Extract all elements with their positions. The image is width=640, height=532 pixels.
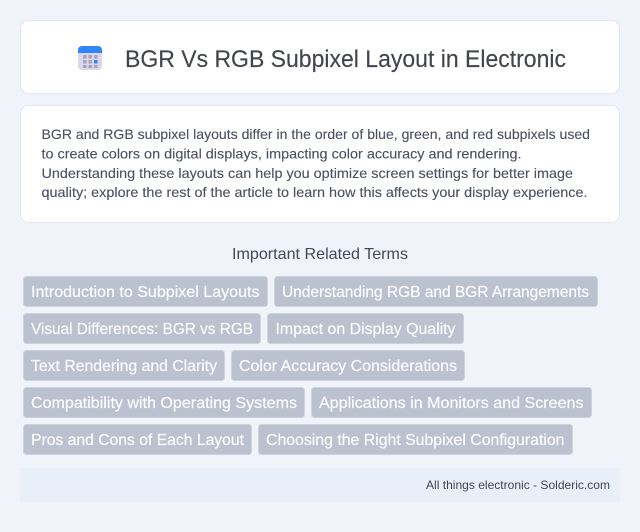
text block: intro: Understanding these layouts can help you optimize screen settings for better image: [42, 165, 573, 181]
chip: applications: [312, 388, 592, 418]
panel: intro paragraph: [20, 106, 620, 222]
chip: understanding: Understanding RGB and BGR Arrangements: [282, 284, 589, 301]
chip: compatibility: [24, 388, 304, 418]
chip: introduction: Introduction to Subpixel Layouts: [31, 284, 260, 301]
chip: compatibility: Compatibility with Operating Systems: [31, 395, 297, 412]
chip: color accuracy: Color Accuracy Considerations: [239, 358, 457, 375]
text block: intro: quality; explore the rest of the article to learn how this affects your display experience.: [42, 184, 588, 200]
chip: understanding: [274, 276, 598, 306]
chip: text rendering: Text Rendering and Clarity: [31, 358, 217, 375]
chip: introduction: [24, 276, 268, 306]
icon: calendar grid: [78, 46, 102, 70]
text block: intro: to create colors on digital displays, impacting color accuracy and rendering.: [42, 146, 522, 162]
footer: [20, 468, 620, 502]
footer: All things electronic - Solderic.com: [426, 478, 610, 492]
chip group: related terms: [24, 276, 598, 454]
title: BGR Vs RGB Subpixel Layout in Electronic: [125, 46, 566, 73]
chip: visual differences: [24, 314, 260, 344]
text block: intro: BGR and RGB subpixel layouts differ in the order of blue, green, and red subpixels used: [42, 126, 590, 142]
heading: related terms: Important Related Terms: [232, 246, 408, 263]
chip: impact: Impact on Display Quality: [276, 321, 456, 338]
chip: pros and cons: Pros and Cons of Each Layout: [31, 432, 245, 449]
chip: color accuracy: [232, 350, 464, 380]
chip: pros and cons: [24, 424, 252, 454]
chip: impact: [268, 314, 464, 344]
text block: intro: [42, 126, 590, 200]
chip: text rendering: [24, 350, 224, 380]
chip: visual differences: Visual Differences: BGR vs RGB: [31, 321, 253, 338]
chip: choosing: Choosing the Right Subpixel Configuration: [266, 432, 564, 449]
header panel: [20, 20, 620, 94]
chip: applications: Applications in Monitors and Screens: [319, 395, 584, 412]
chip: choosing: [258, 424, 572, 454]
